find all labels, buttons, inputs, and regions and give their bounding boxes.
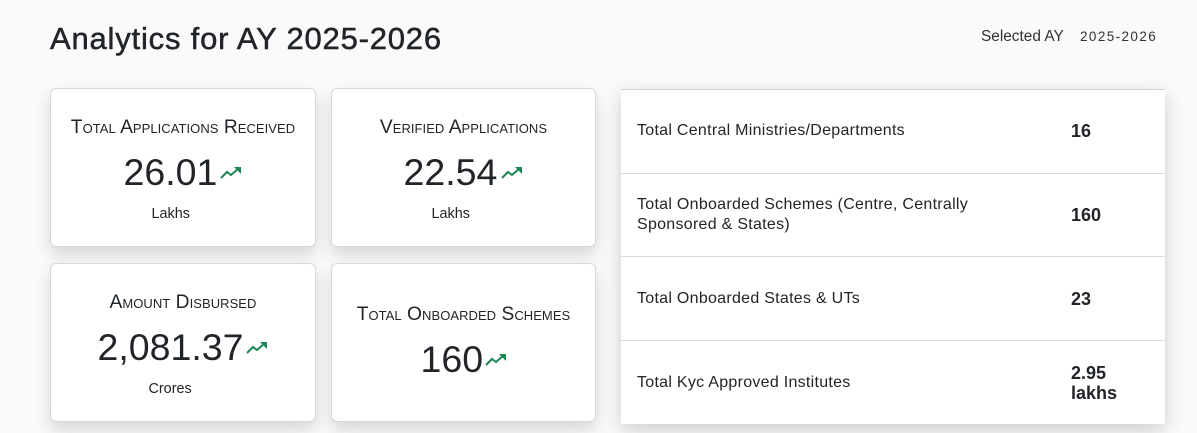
selected academic year — [981, 28, 1157, 45]
row: onboarded schemes — [621, 174, 1165, 256]
icon: trending up — [501, 167, 522, 179]
row: central ministries — [621, 90, 1165, 174]
value: 16 — [1071, 120, 1091, 140]
card heading: Amount Disbursed — [110, 292, 256, 313]
label: Total Central Ministries/Departments — [637, 122, 905, 139]
card heading: Total Onboarded Schemes — [357, 304, 570, 325]
card: verified applications — [331, 88, 596, 247]
value: lakhs — [1071, 382, 1117, 402]
label: Total Onboarded Schemes (Centre, Centrally — [637, 196, 968, 212]
icon: trending up — [246, 342, 267, 354]
value: 2,081.37 — [98, 326, 243, 368]
label: Total Onboarded States & UTs — [637, 290, 860, 307]
icon: trending up — [485, 354, 506, 366]
value: 23 — [1071, 288, 1091, 308]
label — [637, 196, 968, 232]
selected academic year: 2025-2026 — [1080, 29, 1157, 44]
label: Sponsored & States) — [637, 216, 790, 232]
unit: Lakhs — [432, 206, 470, 222]
card: total applications received — [50, 88, 316, 247]
card: total onboarded schemes — [331, 263, 596, 422]
unit: Crores — [148, 380, 192, 396]
row: onboarded states and UTs — [621, 256, 1165, 340]
card heading: Verified Applications — [380, 117, 547, 138]
value: 22.54 — [404, 150, 497, 192]
title: Analytics for AY 2025-2026 — [50, 21, 442, 56]
card: amount disbursed — [50, 263, 316, 422]
unit: Lakhs — [152, 206, 190, 222]
value: 26.01 — [124, 150, 217, 192]
panel: summary table — [621, 88, 1165, 424]
selected academic year: Selected AY — [981, 28, 1064, 45]
value: 2.95 — [1071, 362, 1106, 382]
value: 160 — [1071, 204, 1101, 224]
value: 160 — [420, 338, 483, 380]
label: Total Kyc Approved Institutes — [637, 374, 851, 391]
card heading: Total Applications Received — [71, 117, 295, 138]
row: KYC approved institutes — [637, 362, 1117, 402]
value — [1071, 362, 1117, 402]
icon: trending up — [220, 167, 241, 179]
